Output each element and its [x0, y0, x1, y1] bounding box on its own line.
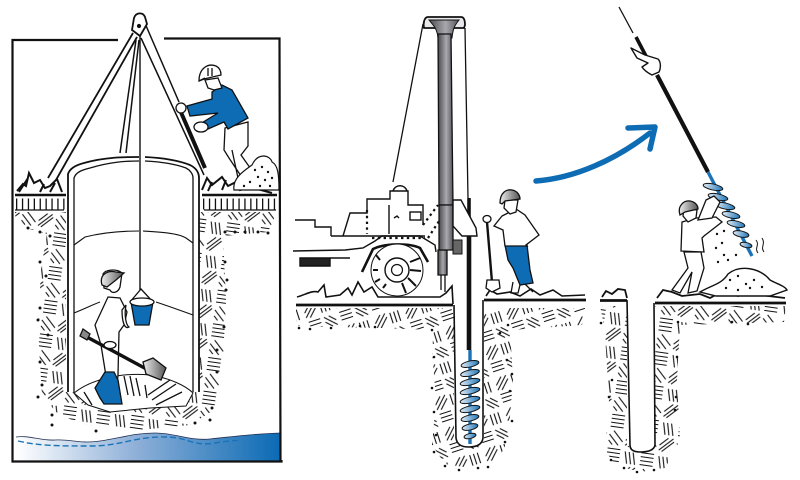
truck: [293, 186, 443, 272]
ground surface: [15, 195, 277, 210]
arrow: auger is withdrawn: [536, 127, 655, 181]
grass tufts: [17, 173, 272, 193]
dirt pile: [234, 156, 279, 190]
drill rod and auger: [460, 236, 480, 444]
panel: raising the auger: [600, 7, 787, 472]
ground debris at shaft floor: [74, 374, 193, 412]
panel: power auger rig: [293, 17, 586, 470]
rig mast: [393, 17, 477, 254]
worker lowering bucket: [176, 65, 253, 178]
ground surface: [296, 300, 586, 305]
grass: [297, 282, 585, 304]
soil around bored hole: [296, 308, 585, 470]
auger being lifted: [619, 7, 764, 256]
ground surface: [600, 300, 786, 303]
frame: [12, 38, 282, 462]
soil around hole: [600, 306, 786, 472]
panel: hand-dug well: [12, 13, 282, 462]
well lining: [68, 157, 199, 392]
water table: [16, 433, 281, 461]
spoil pile: [700, 231, 787, 296]
rig jack: [438, 250, 447, 292]
worker with spade: [483, 190, 539, 293]
open hole: [627, 300, 655, 452]
truck wheel: [371, 244, 423, 296]
bored hole: [454, 300, 483, 447]
worker raising auger: [672, 196, 722, 293]
soil around well: [15, 212, 277, 431]
worker with shovel: [80, 270, 166, 404]
bucket: [130, 289, 154, 325]
tripod: [48, 13, 205, 290]
grass: [602, 289, 785, 298]
